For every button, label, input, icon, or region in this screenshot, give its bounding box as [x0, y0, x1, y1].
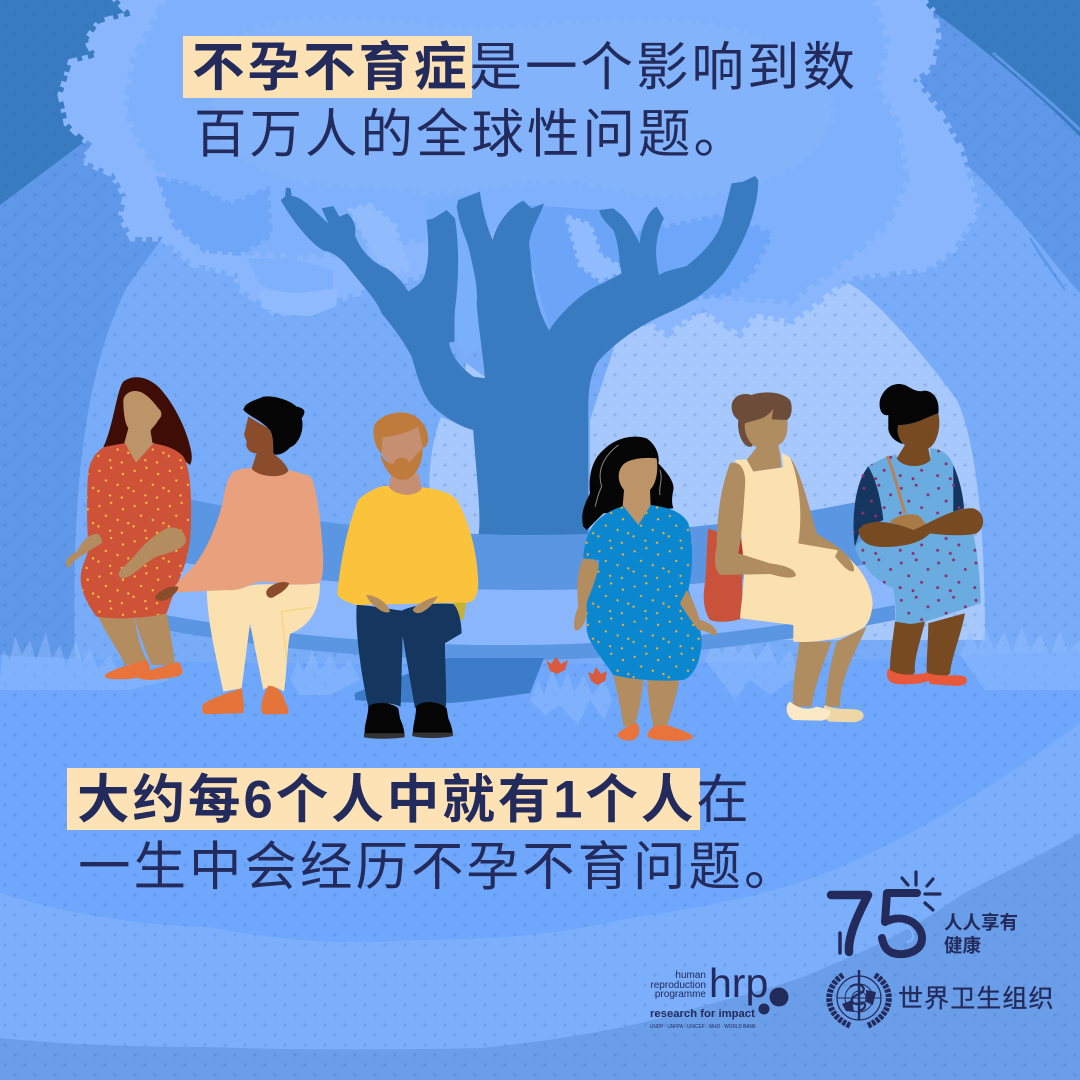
heading highlight [183, 36, 472, 98]
tree trunk [281, 176, 758, 536]
gap between branches [465, 363, 485, 380]
grass [0, 628, 1080, 725]
person 2: person in pink top [155, 396, 323, 714]
HRP descriptor: human [675, 970, 706, 981]
statement text: 一生中会经历不孕不育问题。 [78, 838, 800, 896]
tagline: 人人享有 [944, 912, 1018, 933]
HRP partners: UNDP · UNFPA · UNICEF · WHO · WORLD BANK [650, 1024, 756, 1030]
heading text: 是一个影响到数 [470, 38, 858, 97]
HRP dots [758, 988, 788, 1014]
flowers [546, 657, 607, 685]
bench [165, 495, 895, 703]
tree canopy [62, 0, 977, 360]
statement text: 大约每6个人中就有1个人 [77, 770, 696, 830]
person 1: woman in red dress [66, 377, 192, 680]
logo: WHO 75 [831, 872, 1018, 956]
person 5: woman in cream dress with red bag [704, 392, 873, 722]
HRP descriptor: reproduction [650, 980, 706, 991]
HRP slogan: research for impact [650, 1008, 755, 1020]
top heading [183, 36, 858, 164]
number 75 with rays [831, 872, 940, 954]
WHO emblem [829, 970, 889, 1026]
tagline: 健康 [944, 935, 981, 956]
heading text: 不孕不育症 [192, 38, 470, 97]
bottom statement [67, 768, 800, 896]
WHO name: 世界卫生组织 [898, 985, 1055, 1013]
person 6: woman in light blue dress [853, 384, 983, 686]
logo: HRP [650, 960, 788, 1030]
person 3: man in yellow sweater [337, 413, 478, 739]
statement highlight [67, 768, 700, 830]
HRP descriptor: programme [655, 989, 706, 1000]
person 4: woman in blue dress [574, 437, 717, 741]
logo: WHO emblem and name [829, 970, 1055, 1026]
heading text: 百万人的全球性问题。 [194, 105, 749, 164]
HRP wordmark: hrp [709, 960, 768, 1006]
statement text: 在 [696, 770, 752, 830]
